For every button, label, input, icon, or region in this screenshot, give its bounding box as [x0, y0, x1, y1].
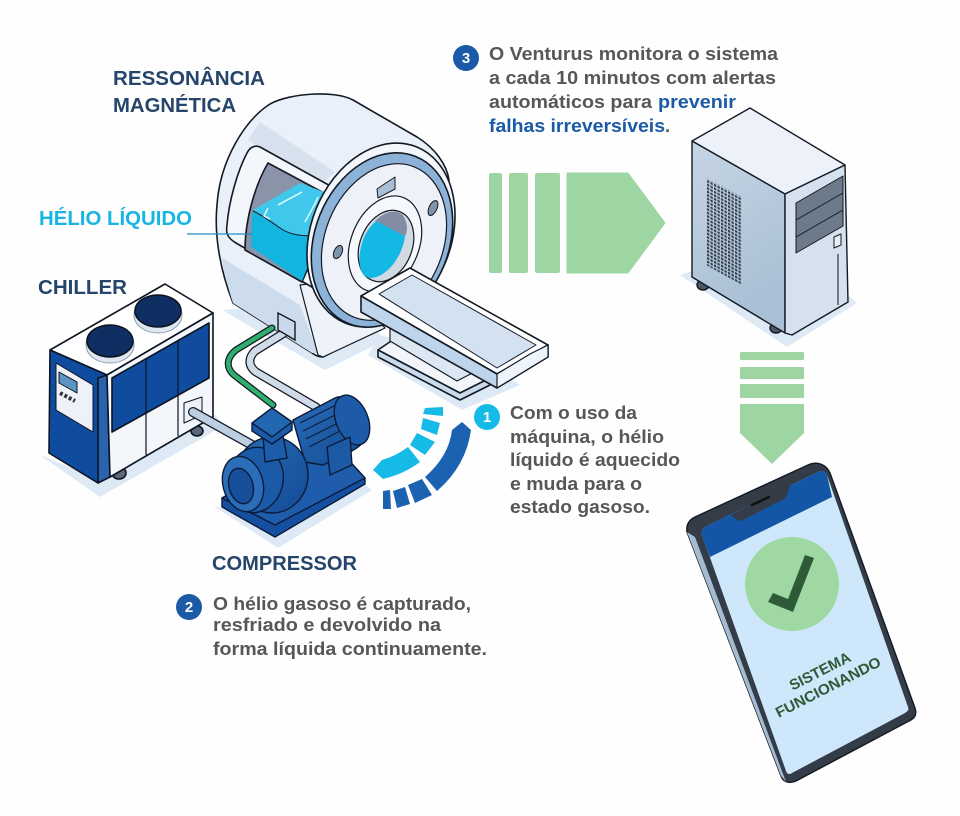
label: chiller: CHILLER: [38, 277, 128, 299]
liquid helium top: [253, 183, 340, 237]
chiller corner strip: [98, 375, 110, 483]
screen header: [702, 471, 832, 557]
status text: [765, 638, 884, 722]
step 1 text: máquina, o hélio: [510, 427, 664, 447]
pump volute: [236, 437, 308, 513]
label: helio liquido: HÉLIO LÍQUIDO: [39, 207, 192, 230]
green arrow right: [489, 173, 665, 273]
step 1: [474, 403, 680, 517]
step 3 text: O Venturus monitora o sistema: [489, 44, 779, 64]
pump flange: [216, 452, 270, 516]
server: [692, 108, 848, 335]
step 2 text: forma líquida continuamente.: [213, 639, 487, 659]
bore liquid: [359, 221, 405, 278]
front ring blue: [286, 131, 478, 349]
step 3 text: falhas irreversíveis: [489, 116, 665, 136]
liquid helium front: [251, 212, 320, 281]
chiller right face: [107, 313, 213, 477]
base plate: [222, 440, 365, 537]
bore interior: [375, 212, 407, 236]
pipes: [193, 328, 316, 445]
front ring white disk: [299, 145, 469, 339]
table pedestal: [390, 322, 482, 381]
control screen: [59, 372, 77, 393]
green pipe: [228, 328, 273, 405]
step 2 text: resfriado e devolvido na: [213, 615, 442, 635]
funcionando: FUNCIONANDO: [773, 654, 884, 722]
check mark: [768, 555, 814, 612]
badge 2: 2: [185, 599, 193, 616]
sistema: SISTEMA: [787, 649, 854, 694]
phone body: [687, 463, 916, 782]
blue segments: [383, 422, 471, 509]
chiller: [49, 284, 213, 483]
vent: [706, 178, 742, 285]
control buttons: [60, 393, 75, 401]
MRI machine: [216, 94, 481, 357]
step 2 text: O hélio gasoso é capturado,: [213, 594, 471, 614]
chiller top: [50, 284, 213, 375]
control panel: [56, 363, 93, 432]
compressor: [216, 390, 377, 537]
motor body: [293, 397, 367, 465]
step 3 text: .: [665, 116, 670, 136]
MRI table: [361, 268, 548, 400]
top flange: [252, 408, 292, 444]
table side: [361, 296, 548, 388]
step 1 text: Com o uso da: [510, 403, 638, 423]
chiller left face: [49, 350, 107, 483]
badge 1: 1: [483, 409, 491, 426]
server side: [692, 141, 785, 333]
notch: [731, 483, 791, 521]
server bays: [796, 176, 843, 253]
MRI window frame: [227, 146, 343, 290]
gray pipe to chiller: [193, 412, 252, 445]
chiller port: [184, 397, 202, 423]
junction box: [327, 437, 352, 475]
MRI window interior: [245, 163, 337, 282]
phone edge: [687, 532, 786, 782]
server feet: [697, 280, 709, 290]
flow arrows: [373, 407, 471, 509]
phone: [687, 463, 916, 782]
badge 1: [474, 404, 500, 430]
green arrow down: [740, 352, 804, 464]
heading: ressonancia magnetica: MAGNÉTICA: [113, 94, 236, 117]
motor end cap: [327, 390, 377, 450]
step 1 text: [510, 403, 680, 517]
MRI pedestal: [300, 280, 385, 357]
badge 3: [453, 45, 479, 71]
chiller wheels: [112, 467, 126, 479]
power button: [834, 234, 841, 248]
step 1 text: e muda para o: [510, 474, 642, 494]
MRI port: [278, 313, 295, 340]
table top: [361, 268, 548, 374]
heading: ressonancia magnetica: RESSONÂNCIA: [113, 66, 265, 90]
step 2: [176, 594, 487, 659]
step 3 text: prevenir: [658, 92, 736, 112]
bore rim: [335, 185, 435, 303]
screen: [702, 471, 908, 774]
front ring outer cover: [281, 121, 481, 349]
fans: [86, 327, 134, 363]
MRI body shading: [222, 258, 318, 353]
ring panel and knobs: [377, 177, 395, 198]
step 3 text: [489, 44, 779, 136]
chiller blue panels: [112, 323, 209, 432]
step 3 text: automáticos para: [489, 92, 653, 112]
badge 2: [176, 594, 202, 620]
speaker: [752, 497, 769, 505]
server front: [785, 165, 848, 335]
check circle: [745, 537, 839, 631]
step 1 text: estado gasoso.: [510, 497, 650, 517]
pump neck: [263, 435, 287, 462]
cyan segments: [373, 407, 443, 479]
table base plate: [378, 335, 490, 400]
gray pipe to MRI: [250, 333, 316, 407]
badge 3: 3: [462, 50, 470, 67]
shadows: [40, 270, 857, 548]
table surface: [379, 275, 536, 368]
step 1 text: líquido é aquecido: [510, 450, 680, 470]
MRI body: [216, 94, 449, 357]
label: compressor: COMPRESSOR: [212, 553, 358, 575]
step 3: [453, 44, 779, 136]
heading: ressonancia magnetica: [113, 66, 265, 117]
step 2 text: [213, 594, 487, 659]
server top: [692, 108, 845, 194]
step 3 text: a cada 10 minutos com alertas: [489, 68, 776, 88]
